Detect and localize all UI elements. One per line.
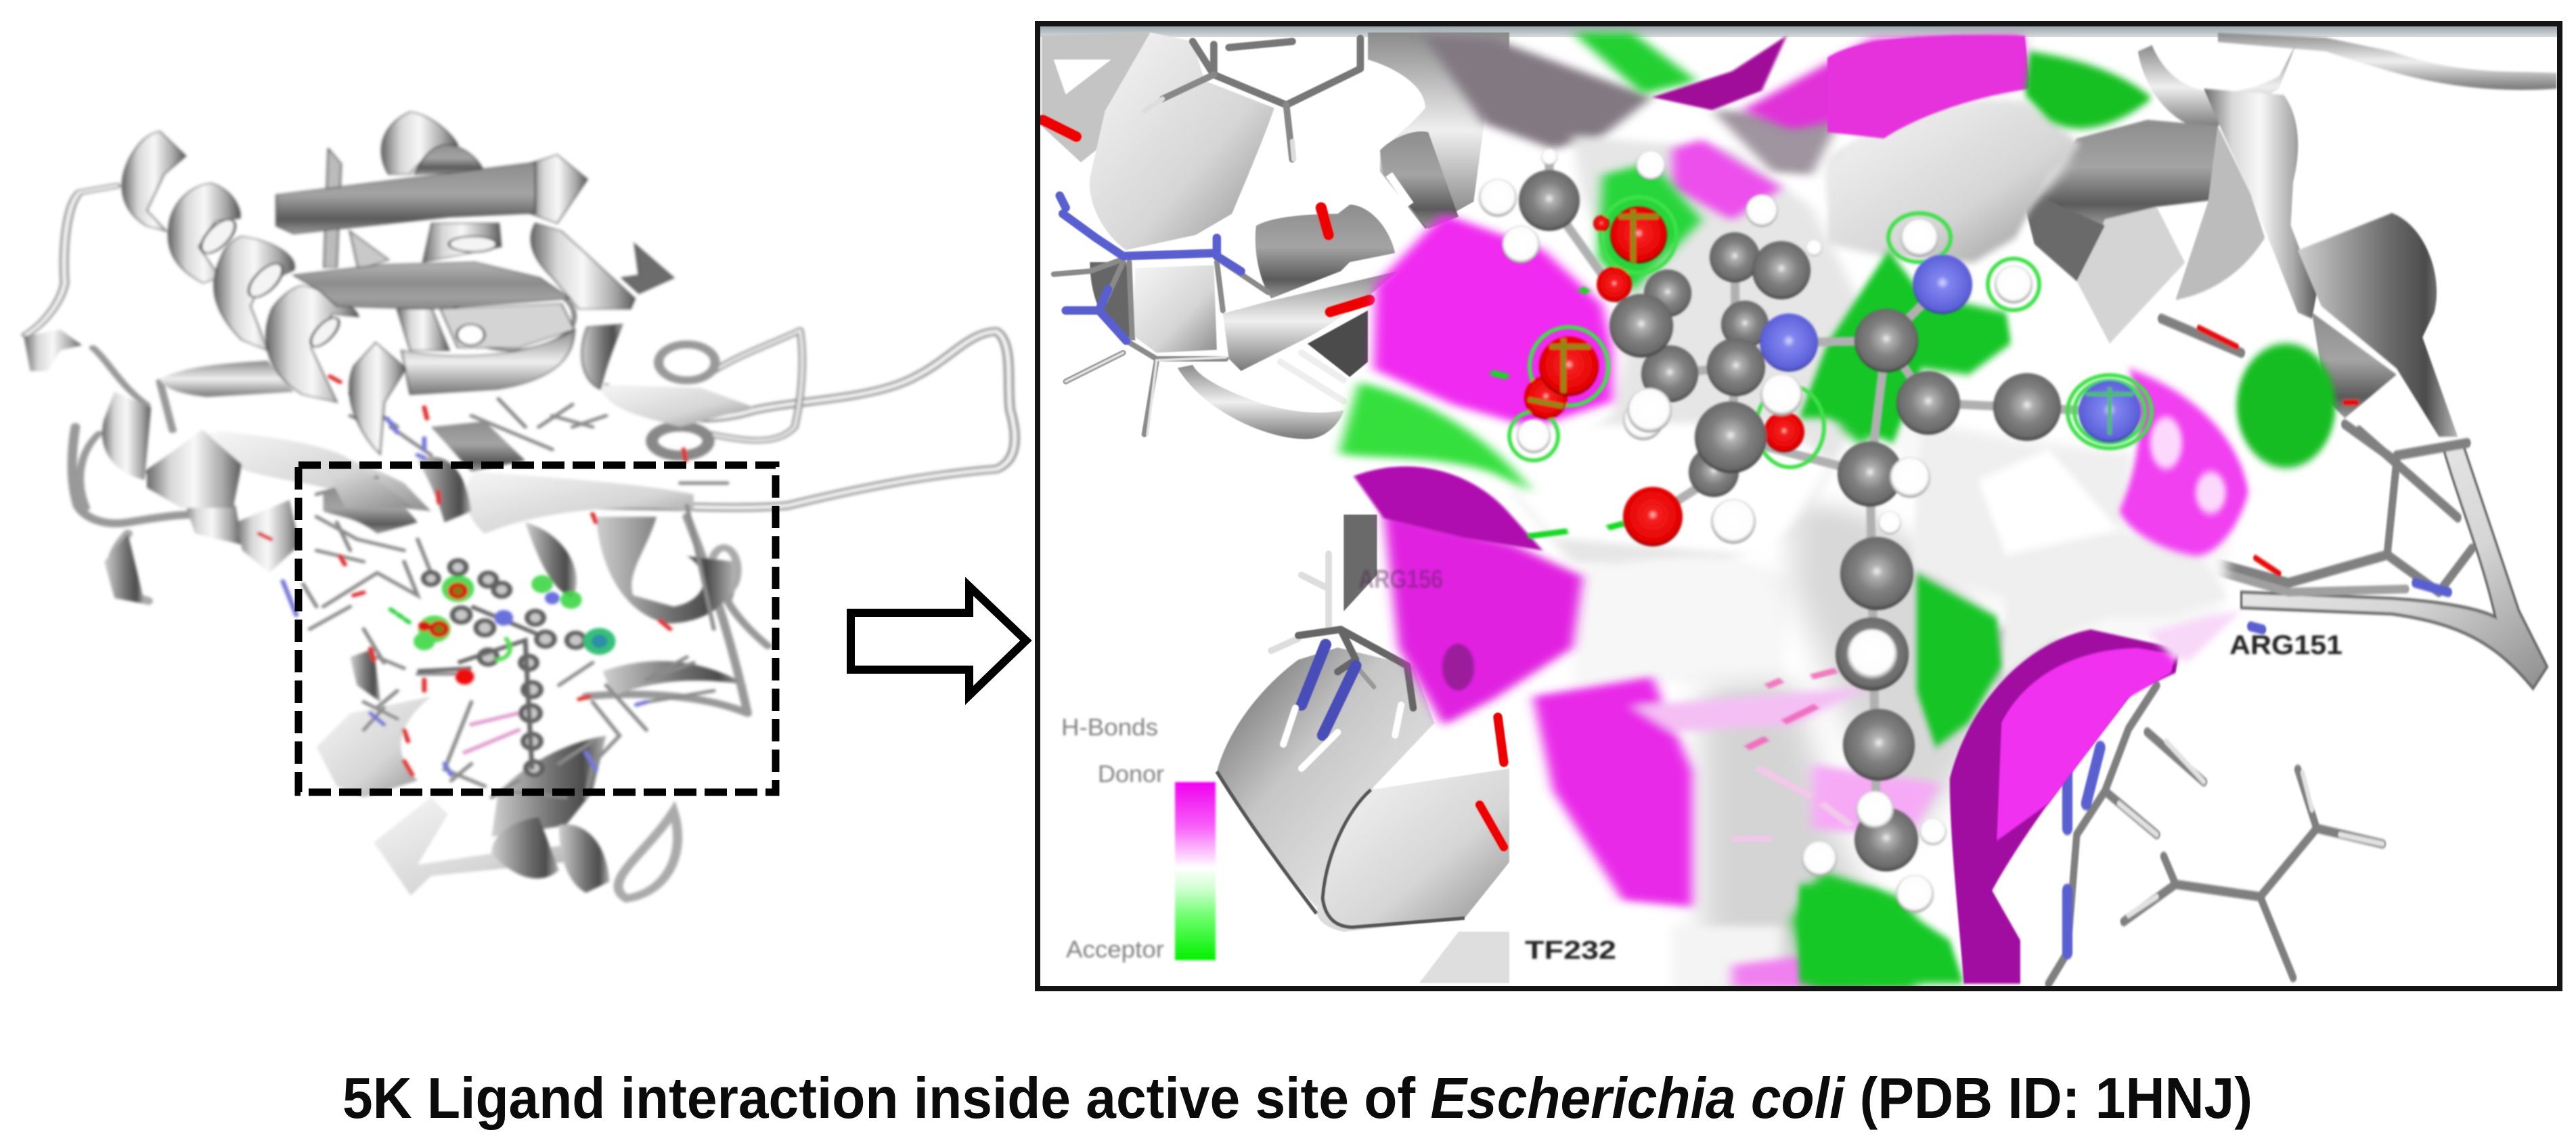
green cross on ring <box>2086 387 2133 435</box>
crescent highlights <box>2150 417 2226 514</box>
zoomed scene <box>1040 26 2557 989</box>
loop chains <box>72 330 1015 713</box>
top strip <box>1040 26 2557 37</box>
lower white surface <box>1912 425 2227 679</box>
dark magenta surface edges <box>1354 36 1787 691</box>
chain, upper left <box>26 186 173 508</box>
caption: 5K Ligand interaction inside active site of Escherichia coli (PDB ID: 1HNJ) <box>342 1066 2252 1131</box>
ligand bonds <box>1549 163 2110 840</box>
magenta donor surfaces <box>1373 36 2030 989</box>
ribbons, lower left <box>1217 515 1509 983</box>
legend labels: Acceptor <box>1066 936 1164 963</box>
right surfaces <box>1799 35 2336 984</box>
ribbons and sticks, right <box>2020 33 2556 984</box>
soft central grey band <box>1702 504 2011 989</box>
label: ARG156: ARG156 <box>1358 565 1443 594</box>
label: ARG151: ARG151 <box>2229 630 2342 660</box>
olive ring overlay <box>1528 210 1658 406</box>
pink dashed bonds <box>1491 288 1971 839</box>
bottom purple sheet <box>1950 630 2180 984</box>
legend labels <box>1061 714 1164 963</box>
helix lens holes <box>194 217 497 349</box>
ribbons, upper left <box>1042 33 1509 439</box>
carbon atoms <box>1519 170 2061 871</box>
oxygen atoms <box>1524 207 1804 546</box>
helix crescents <box>123 112 673 454</box>
protein upper half: helices and strands <box>24 112 673 508</box>
ring loop <box>453 283 575 350</box>
arrow tip and left ribbons <box>24 330 414 508</box>
coloured bonds <box>259 376 686 775</box>
panel: zoomed active site <box>1038 24 2560 989</box>
grey hydrophobic surface <box>1423 36 2240 687</box>
white area, bottom of band <box>1672 926 1781 989</box>
residue labels <box>1358 565 2342 965</box>
pink fade by label <box>2148 611 2242 661</box>
callout: dashed selection box <box>298 465 776 792</box>
legend: H-bonds <box>1061 714 1216 963</box>
hydrogen atoms <box>1479 149 2033 913</box>
panel: full protein structure <box>24 112 1015 899</box>
bright sheet inner <box>1997 648 2175 841</box>
right magenta crescent <box>2119 368 2248 556</box>
H-bond rings <box>1509 197 2152 467</box>
legend labels: Donor <box>1098 761 1164 787</box>
legend labels: H-Bonds <box>1061 714 1158 741</box>
protein lower half and loops <box>72 330 1015 899</box>
legend colour bar <box>1175 782 1216 960</box>
central surfaces <box>1339 33 2240 989</box>
arrow: to zoomed view <box>851 586 1026 695</box>
label: TF232: TF232 <box>1525 936 1616 965</box>
bright white pocket <box>1516 420 1828 554</box>
panel border <box>1038 24 2560 989</box>
ligand atoms <box>1061 149 2342 965</box>
ligand atoms, small view <box>414 561 615 775</box>
upper white surface <box>1827 100 2081 263</box>
green acceptor surfaces <box>1339 33 1916 989</box>
ribbons, lower <box>317 649 747 899</box>
ribbons, middle <box>104 385 754 624</box>
nitrogen atoms <box>1760 255 2141 443</box>
top magenta band <box>1827 35 2030 138</box>
side-chain sticks <box>303 393 728 798</box>
green surfaces <box>1799 51 2336 984</box>
